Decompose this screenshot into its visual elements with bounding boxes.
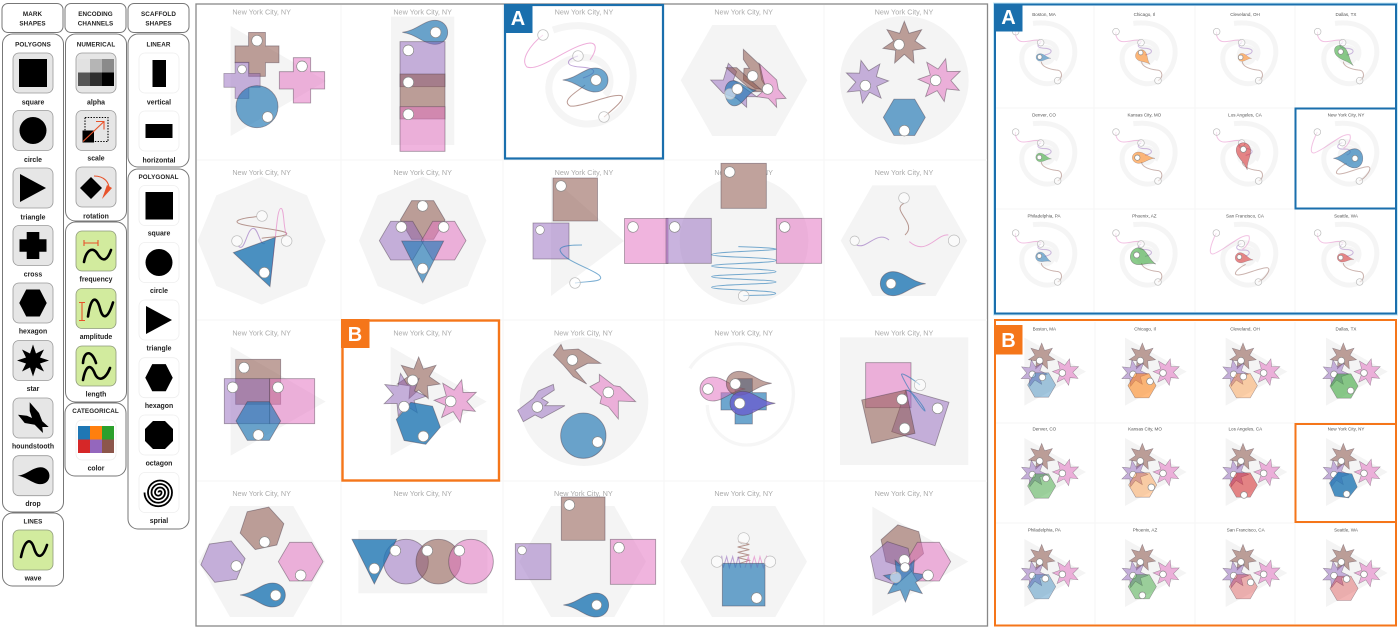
cell: row 1 col 5 stars on circle (840, 7, 969, 145)
icon: rotation (76, 167, 116, 220)
icon: triangle (139, 300, 179, 352)
small multiple: New York City highlighted (1311, 112, 1377, 184)
cell: row 2 col 3 squares with wave: New York City, NY (555, 168, 614, 177)
cell: row 2 col 2 hexagons (359, 168, 486, 305)
small multiple: New York City highlighted: New York City, NY (1328, 427, 1364, 432)
icon: horizontal: horizontal (143, 158, 176, 164)
callout box: A highlight: A (511, 8, 525, 30)
small multiple: Denver: Denver, CO (1032, 427, 1057, 432)
cell: row 4 col 5 clustered hexagons and star: New York City, NY (875, 489, 933, 498)
small multiple: Los Angeles: Los Angeles, CA (1228, 112, 1263, 117)
small multiple: Dallas: Dallas, TX (1336, 326, 1356, 331)
icon: circle: circle (150, 288, 168, 295)
callout box: A highlight (504, 4, 663, 158)
small multiple: San Francisco (1210, 213, 1276, 285)
cell: row 2 col 4 squares with spring (666, 163, 822, 305)
panel: A small multiples by city (994, 3, 1398, 315)
cell: row 1 col 3 spiral waves (525, 7, 633, 124)
small multiple: Kansas City (1119, 427, 1187, 506)
panel: scaffold shapes header: SHAPES (145, 20, 172, 28)
small multiple: Phoenix: Phoenix, AZ (1132, 213, 1157, 218)
icon: spiral: sprial (150, 518, 168, 525)
small multiple: Cleveland: Cleveland, OH (1230, 326, 1260, 331)
cell: row 3 col 4 drops and cross (690, 328, 793, 445)
cell: row 4 col 4 springs and square: New York City, NY (714, 489, 773, 498)
icon: houndstooth: houndstooth (12, 444, 54, 450)
highlight box: New York City in A (1296, 108, 1396, 208)
cell: row 3 col 4 drops and cross: New York City, NY (714, 328, 773, 337)
heading: linear: LINEAR (147, 42, 171, 48)
small multiple: Boston (1012, 12, 1075, 84)
cell: row 4 col 1 hexagons and drop: New York City, NY (232, 489, 291, 498)
cell: row 4 col 5 clustered hexagons and star (864, 489, 968, 616)
cell: row 3 col 5 rotated squares: New York City, NY (875, 328, 933, 337)
panel: lines (2, 513, 64, 586)
small multiple: Phoenix (1113, 213, 1175, 285)
small multiple: Denver (1018, 427, 1086, 506)
panel: mark shapes header: SHAPES (19, 20, 46, 28)
callout box: B highlight (341, 319, 499, 480)
panel: encoding channels header (65, 4, 126, 32)
small multiple: Chicago (1119, 326, 1187, 406)
panel: main small multiples grid (196, 4, 988, 626)
icon: vertical: vertical (147, 100, 171, 106)
panel: mark shapes header: MARK (23, 11, 42, 18)
icon: alpha: alpha (87, 100, 105, 106)
small multiple: Seattle (1320, 528, 1388, 607)
small multiple: Los Angeles (1220, 427, 1287, 506)
icon: square (139, 186, 179, 238)
small multiple: Chicago (1113, 12, 1175, 84)
small multiple: Denver (1012, 112, 1075, 184)
panel: encoding channels header: ENCODING (78, 11, 113, 18)
small multiple: Philadelphia: Philadelphia, PA (1027, 213, 1061, 218)
small multiple: Chicago: Chicago, Il (1134, 12, 1155, 17)
icon: drop (13, 456, 53, 508)
panel: encoding channels header: CHANNELS (78, 20, 113, 28)
icon: color: color (88, 466, 105, 472)
panel: scaffold shapes header (128, 4, 189, 32)
icon: square (13, 53, 53, 106)
cell: row 3 col 3 houndstooth and circle: New York City, NY (554, 328, 613, 337)
icon: length (76, 346, 116, 398)
cell: row 2 col 1 triangle on octagon (198, 168, 326, 305)
heading: lines: LINES (24, 518, 42, 526)
cell: row 1 col 4 houndstooth cluster (681, 7, 807, 136)
cell: row 3 col 3 houndstooth and circle (518, 328, 648, 466)
panel: polygonal (128, 169, 189, 529)
icon: amplitude: amplitude (80, 334, 112, 341)
icon: scale: scale (87, 156, 105, 162)
small multiple: Boston: Boston, MA (1033, 326, 1057, 331)
icon: hexagon: hexagon (19, 328, 47, 336)
icon: hexagon (13, 283, 53, 336)
small multiple: Seattle (1314, 213, 1377, 285)
small multiple: Dallas (1314, 12, 1377, 84)
small multiple: Philadelphia (1018, 528, 1086, 607)
cell: row 4 col 4 springs and square (680, 489, 807, 617)
small multiple: Seattle: Seattle, WA (1334, 213, 1359, 218)
heading: polygons: POLYGONS (15, 42, 51, 48)
cell: row 2 col 1 triangle on octagon: New York City, NY (232, 168, 291, 177)
small multiple: Los Angeles: Los Angeles, CA (1229, 427, 1263, 432)
cell: row 1 col 4 houndstooth cluster: New York City, NY (714, 7, 773, 16)
small multiple: Cleveland (1213, 12, 1276, 84)
small multiple: Kansas City: Kansas City, MO (1127, 112, 1162, 117)
icon: square: square (148, 230, 170, 238)
cell: row 3 col 2 stars and hexagon: New York City, NY (393, 328, 452, 337)
small multiple: Dallas: Dallas, TX (1336, 12, 1356, 17)
cell: row 3 col 1 squares and hexagon (224, 328, 326, 456)
small multiple: Philadelphia: Philadelphia, PA (1028, 528, 1062, 533)
label: B: B (1001, 330, 1016, 352)
icon: circle (13, 110, 53, 164)
panel: mark shapes header (2, 4, 63, 32)
cell: row 2 col 4 squares with spring: New York City, NY (714, 168, 773, 177)
icon: cross: cross (24, 272, 42, 278)
cell: row 1 col 3 spiral waves: New York City, NY (555, 7, 614, 16)
cell: row 2 col 5 waves and drop (841, 168, 967, 296)
small multiple: Cleveland: Cleveland, OH (1230, 12, 1260, 17)
cell: row 1 col 2 stacked squares: New York City, NY (393, 7, 452, 16)
label: A: A (1001, 7, 1016, 29)
small multiple: Denver: Denver, CO (1032, 112, 1056, 117)
panel: scaffold shapes header: SCAFFOLD (141, 11, 176, 18)
icon: rotation: rotation (83, 214, 109, 220)
icon: octagon: octagon (146, 460, 172, 468)
highlight box: New York City in B (1296, 424, 1396, 522)
small multiple: Kansas City: Kansas City, MO (1128, 427, 1162, 432)
icon: alpha (76, 53, 116, 106)
icon: wave: wave (24, 576, 42, 582)
cell: row 4 col 2 circles and triangle (352, 489, 493, 593)
small multiple: Seattle: Seattle, WA (1334, 528, 1359, 533)
cell: row 3 col 5 rotated squares (840, 328, 968, 465)
icon: cross (13, 226, 53, 278)
cell: row 3 col 2 stars and hexagon (380, 328, 487, 456)
small multiple: Kansas City (1113, 112, 1175, 184)
cell: row 1 col 5 stars on circle: New York City, NY (875, 7, 933, 16)
cell: row 1 col 2 stacked squares (391, 7, 454, 151)
small multiple: Boston (1018, 326, 1086, 406)
panel: B small multiples by city (995, 320, 1396, 626)
small multiple: New York City highlighted: New York City, NY (1328, 112, 1364, 117)
icon: houndstooth (12, 398, 54, 450)
callout box: B highlight: B (348, 324, 362, 346)
label: B (995, 325, 1022, 354)
cell: row 2 col 3 squares with wave (533, 168, 668, 296)
small multiple: Cleveland (1220, 326, 1287, 406)
icon: spiral (139, 472, 179, 525)
icon: length: length (86, 392, 106, 398)
heading: numerical: NUMERICAL (77, 42, 115, 48)
small multiple: San Francisco (1220, 528, 1287, 607)
cell: row 1 col 1 crosses (224, 7, 326, 136)
icon: hexagon: hexagon (145, 403, 173, 410)
label: A (995, 4, 1022, 32)
icon: circle: circle (24, 157, 42, 164)
icon: triangle (13, 168, 53, 222)
cell: row 1 col 1 crosses: New York City, NY (232, 7, 291, 16)
icon: frequency: frequency (80, 276, 113, 284)
icon: triangle: triangle (147, 346, 172, 352)
small multiple: San Francisco: San Francisco, CA (1227, 528, 1266, 533)
icon: frequency (76, 231, 116, 284)
heading: categorical: CATEGORICAL (72, 408, 119, 415)
panel: numerical (66, 34, 126, 221)
icon: star (13, 340, 53, 393)
icon: drop: drop (25, 501, 41, 508)
cell: row 3 col 1 squares and hexagon: New York City, NY (232, 328, 291, 337)
small multiple: Chicago: Chicago, Il (1134, 326, 1156, 331)
panel: wave channels (66, 222, 126, 402)
cell: row 4 col 1 hexagons and drop (198, 489, 325, 617)
icon: square: square (22, 100, 44, 106)
heading: polygonal: POLYGONAL (138, 174, 179, 181)
icon: hexagon (139, 358, 179, 410)
icon: amplitude (76, 288, 116, 341)
small multiple: New York City highlighted (1320, 427, 1388, 506)
cell: row 4 col 3 squares and drop: New York City, NY (554, 489, 613, 498)
small multiple: Phoenix: Phoenix, AZ (1133, 528, 1157, 533)
panel: categorical (65, 403, 126, 476)
cell: row 2 col 2 hexagons: New York City, NY (393, 168, 452, 177)
icon: star: star (27, 386, 40, 393)
small multiple: Los Angeles (1213, 112, 1276, 184)
icon: scale (76, 110, 116, 162)
small multiple: San Francisco: San Francisco, CA (1226, 213, 1265, 218)
panel: linear (128, 34, 189, 167)
cell: row 4 col 2 circles and triangle: New York City, NY (393, 489, 452, 498)
small multiple: Philadelphia (1012, 213, 1075, 285)
cell: row 4 col 3 squares and drop (515, 489, 656, 617)
small multiple: Boston: Boston, MA (1032, 12, 1057, 17)
icon: triangle: triangle (21, 214, 46, 222)
panel: polygons (2, 34, 64, 512)
icon: circle (139, 242, 179, 295)
icon: octagon (139, 415, 179, 468)
small multiple: Dallas (1320, 326, 1388, 406)
cell: row 2 col 5 waves and drop: New York City, NY (875, 168, 933, 177)
small multiple: Phoenix (1119, 528, 1187, 607)
